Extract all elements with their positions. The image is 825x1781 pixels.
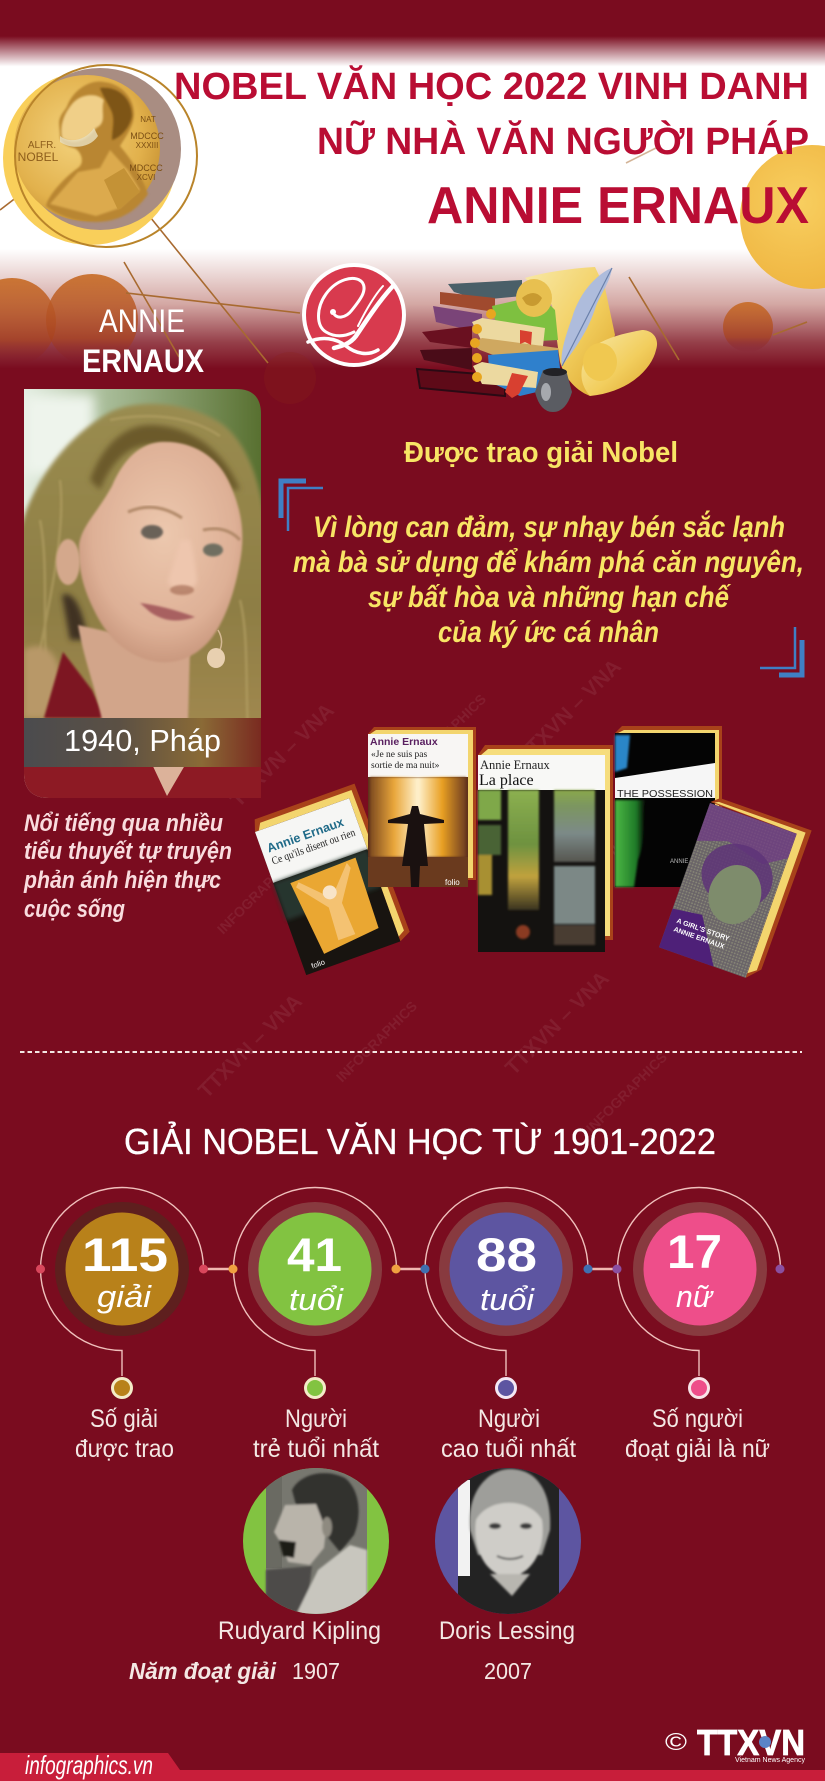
title bbox=[174, 64, 809, 235]
stat: oldest 88: cao tuổi nhất bbox=[441, 1435, 576, 1463]
watermarks: INFOGRAPHICS bbox=[549, 828, 636, 915]
photo: Annie Ernaux portrait bbox=[20, 389, 266, 800]
book: La place bbox=[478, 745, 613, 952]
book: Je ne suis pas sortie de ma nuit: Annie Ernaux bbox=[370, 736, 438, 748]
icon: closing bracket bbox=[760, 627, 802, 675]
title: ANNIE ERNAUX bbox=[427, 177, 809, 235]
book: The Possession: THE POSSESSION bbox=[617, 789, 713, 800]
quote: citation text: của ký ức cá nhân bbox=[438, 616, 659, 649]
watermarks bbox=[194, 655, 670, 1136]
book: La place: La place bbox=[479, 772, 534, 789]
stat: oldest 88: Người bbox=[478, 1405, 540, 1433]
watermarks: INFOGRAPHICS bbox=[214, 850, 301, 937]
watermarks: INFOGRAPHICS bbox=[583, 1049, 670, 1136]
TTXVN logo: © bbox=[665, 1729, 687, 1756]
stat: 17 women: Số người bbox=[652, 1405, 743, 1433]
text: famous for novels: Nổi tiếng qua nhiều bbox=[24, 810, 223, 837]
icon: Nobel medal: NAT bbox=[140, 115, 156, 124]
laureate names and years: Rudyard Kipling bbox=[218, 1617, 381, 1645]
stat: oldest 88: 88 bbox=[476, 1228, 537, 1281]
stat: oldest 88: tuổi bbox=[480, 1282, 535, 1317]
stat: 17 women: 17 bbox=[667, 1225, 722, 1278]
icon: Nobel medal bbox=[3, 65, 197, 247]
icon: Nobel medal: XXXIII bbox=[136, 141, 158, 150]
TTXVN logo: Vietnam News Agency bbox=[735, 1757, 805, 1764]
stat: youngest 41 bbox=[228, 1187, 400, 1463]
stat: 115 prizes bbox=[36, 1187, 208, 1463]
stat: 115 prizes: Số giải bbox=[90, 1405, 158, 1433]
footer ribbon: infographics.vn bbox=[25, 1750, 153, 1780]
caption: birth year and country bbox=[24, 718, 261, 767]
decorative circles and lines bbox=[0, 145, 825, 404]
text: famous for novels bbox=[23, 810, 232, 923]
watermarks: TTXVN – VNA bbox=[194, 990, 307, 1103]
TTXVN logo: TTXVN bbox=[697, 1722, 805, 1763]
watermarks: INFOGRAPHICS bbox=[333, 998, 420, 1085]
book: Ce qu'ils disent ou rien: Ce qu'ils disent ou rien bbox=[270, 827, 357, 868]
laureate names and years: Năm đoạt giải bbox=[129, 1658, 277, 1684]
stat: 17 women bbox=[612, 1187, 784, 1463]
heading: awarded the Nobel: Được trao giải Nobel bbox=[404, 437, 678, 469]
icon: Nobel medal: ALFR. bbox=[28, 140, 56, 151]
book: Je ne suis pas sortie de ma nuit: «Je ne suis pas bbox=[371, 750, 428, 760]
laureate names and years: 2007 bbox=[484, 1658, 532, 1684]
book: Je ne suis pas sortie de ma nuit: sortie de ma nuit» bbox=[371, 761, 440, 771]
stat connectors bbox=[204, 1268, 617, 1270]
book: La place: Annie Ernaux bbox=[480, 758, 551, 772]
stat: youngest 41: trẻ tuổi nhất bbox=[253, 1435, 379, 1463]
stat: 115 prizes: được trao bbox=[75, 1435, 174, 1463]
book: Ce qu'ils disent ou rien: Annie Ernaux bbox=[265, 815, 346, 855]
title: NOBEL VĂN HỌC 2022 VINH DANH bbox=[174, 64, 809, 108]
portrait: Rudyard Kipling bbox=[243, 1468, 389, 1615]
book: Je ne suis pas sortie de ma nuit: folio bbox=[445, 878, 460, 887]
icon: books, scroll, feather and ink bbox=[417, 267, 657, 412]
name: Annie Ernaux: ANNIE bbox=[99, 303, 185, 339]
stat: youngest 41: 41 bbox=[287, 1228, 342, 1281]
watermarks: TTXVN – VNA bbox=[513, 655, 626, 768]
book: A Girl's Story: A GIRL'S STORY bbox=[675, 918, 730, 943]
book: The Possession: ANNIE bbox=[670, 859, 688, 865]
quote: citation text: sự bất hòa và những hạn chế bbox=[368, 581, 732, 614]
icon: opening bracket bbox=[281, 481, 323, 531]
book: Je ne suis pas sortie de ma nuit bbox=[368, 727, 476, 887]
stat: youngest 41: Người bbox=[285, 1405, 347, 1433]
book: The Possession bbox=[615, 726, 722, 887]
icon: Nobel medal: MDCCC bbox=[129, 163, 163, 173]
laureate names and years: 1907 bbox=[292, 1658, 340, 1684]
name: Annie Ernaux: ERNAUX bbox=[82, 343, 205, 379]
name: Annie Ernaux bbox=[82, 303, 205, 379]
icon: Nobel medal: MDCCC bbox=[130, 131, 164, 141]
title: NỮ NHÀ VĂN NGƯỜI PHÁP bbox=[317, 119, 809, 163]
laureate names and years: Doris Lessing bbox=[439, 1617, 575, 1645]
book: A Girl's Story bbox=[659, 795, 812, 982]
stat: oldest 88 bbox=[420, 1188, 592, 1463]
stat: 115 prizes: giải bbox=[97, 1279, 152, 1314]
text: famous for novels: cuộc sống bbox=[24, 896, 125, 923]
book: Ce qu'ils disent ou rien: folio bbox=[310, 957, 326, 971]
icon: Nobel medal: NOBEL bbox=[18, 150, 59, 164]
footer ribbon bbox=[0, 1750, 825, 1781]
stat: youngest 41: tuổi bbox=[289, 1282, 344, 1317]
portrait: Doris Lessing bbox=[435, 1468, 581, 1615]
stat: 115 prizes: 115 bbox=[82, 1228, 168, 1281]
stat: 17 women: đoạt giải là nữ bbox=[625, 1435, 770, 1463]
heading: Nobel literature 1901-2022: GIẢI NOBEL VĂN HỌC TỪ 1901-2022 bbox=[124, 1121, 716, 1162]
book: Ce qu'ils disent ou rien bbox=[251, 783, 412, 975]
caption: birth year and country: 1940, Pháp bbox=[64, 723, 221, 758]
watermarks: INFOGRAPHICS bbox=[402, 691, 489, 778]
watermarks: TTXVN – VNA bbox=[501, 967, 614, 1080]
quote: citation text bbox=[293, 510, 804, 649]
text: famous for novels: phản ánh hiện thực bbox=[23, 867, 221, 894]
divider bbox=[20, 1051, 802, 1053]
text: famous for novels: tiểu thuyết tự truyện bbox=[24, 838, 232, 865]
icon: literature L logo bbox=[302, 263, 406, 367]
stat: 17 women: nữ bbox=[676, 1279, 714, 1314]
watermarks: TTXVN – VNA bbox=[226, 699, 339, 812]
icon: Nobel medal: XCVI bbox=[137, 173, 155, 182]
book: A Girl's Story: ANNIE ERNAUX bbox=[672, 926, 725, 951]
laureate names and years bbox=[129, 1617, 575, 1684]
